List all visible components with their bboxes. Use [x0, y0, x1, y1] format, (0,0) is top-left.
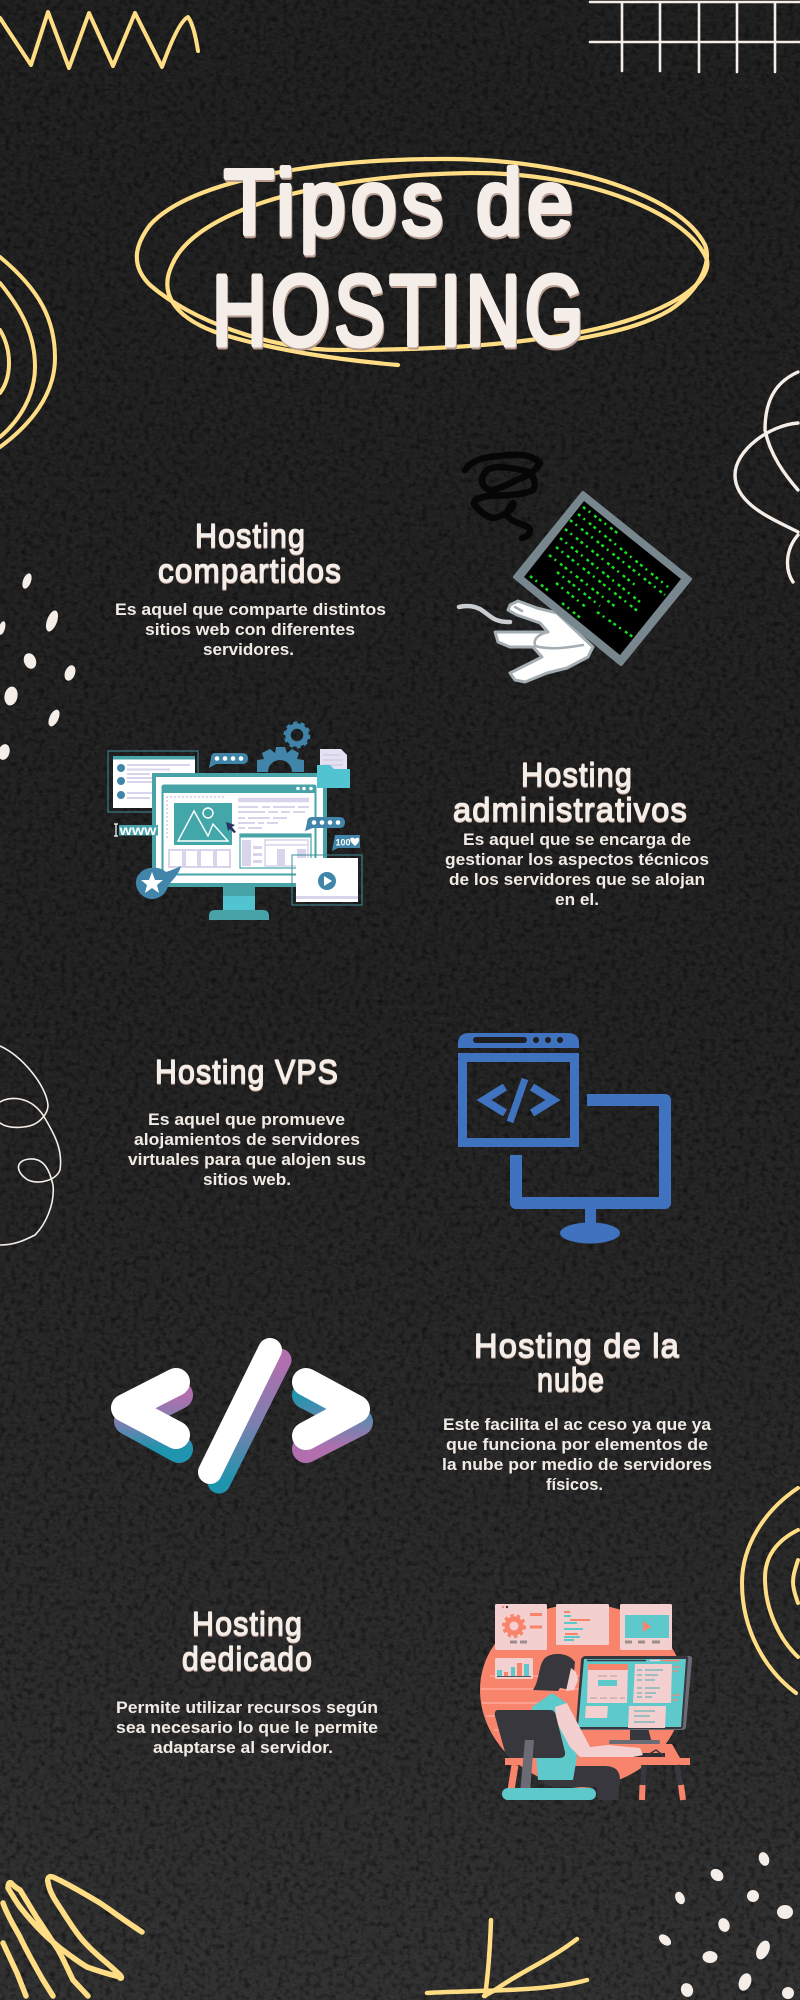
video panel — [620, 1604, 672, 1650]
legs — [541, 1766, 620, 1800]
decoration: yellow zigzag — [0, 12, 198, 68]
code symbol — [484, 1079, 553, 1122]
description: físicos. — [546, 1476, 603, 1494]
cursor — [226, 822, 236, 833]
finger lines — [515, 607, 583, 648]
description: Permite utilizar recursos según — [116, 1699, 378, 1717]
code panel — [556, 1604, 609, 1645]
description: Es aquel que comparte distintos — [115, 601, 386, 619]
monitor stand — [209, 887, 269, 920]
description: servidores. — [203, 641, 294, 659]
icon: tablet with code held by hand — [459, 455, 690, 682]
heading — [453, 756, 688, 828]
description: gestionar los aspectos técnicos — [445, 851, 709, 869]
icon: web design monitor — [108, 723, 362, 920]
browser top bar — [458, 1033, 579, 1048]
hand — [495, 601, 593, 682]
content lines — [238, 798, 309, 802]
heading — [474, 1327, 680, 1398]
symbol face — [125, 1350, 356, 1472]
left browser window — [108, 751, 198, 812]
description — [116, 1699, 378, 1757]
icon: 3D code symbol — [125, 1350, 359, 1482]
image block — [174, 803, 232, 845]
hair — [533, 1654, 575, 1691]
small gear — [285, 723, 309, 747]
heading: Hosting — [521, 756, 633, 793]
tablet — [515, 493, 690, 664]
small chart panel — [240, 834, 311, 868]
section: hosting administrativos text — [445, 756, 709, 909]
100 like bubble — [332, 835, 360, 851]
title scribble ellipse — [137, 159, 707, 365]
inner window — [162, 786, 316, 874]
monitor — [154, 775, 325, 885]
dotted frame — [167, 797, 225, 838]
decoration: right white scribble — [735, 372, 798, 582]
heading: Hosting VPS — [155, 1053, 339, 1090]
description: en el. — [555, 891, 599, 909]
description: Es aquel que promueve — [148, 1111, 345, 1129]
description — [115, 601, 386, 659]
decoration: right yellow spiral — [742, 1488, 798, 1693]
description: alojamientos de servidores — [134, 1131, 360, 1149]
folder and document — [317, 749, 350, 788]
heading — [158, 517, 342, 589]
decoration: left white dabs — [0, 572, 77, 761]
symbol depth — [128, 1360, 359, 1482]
description: de los servidores que se alojan — [449, 871, 705, 889]
description: sitios web con diferentes — [145, 621, 355, 639]
decoration: left yellow spiral — [0, 257, 55, 447]
heading: Hosting — [192, 1605, 303, 1642]
description: sea necesario lo que le permite — [116, 1719, 378, 1737]
section: hosting compartidos text — [115, 517, 386, 659]
browser window — [462, 1058, 574, 1142]
heading: administrativos — [453, 791, 688, 828]
large gear — [257, 747, 304, 772]
description — [442, 1416, 712, 1494]
heading: nube — [537, 1361, 605, 1398]
decoration: white grid — [590, 2, 800, 72]
description: Este facilita el ac ceso ya que ya — [443, 1416, 712, 1434]
chair — [495, 1710, 596, 1800]
title: Tipos de — [224, 152, 578, 254]
heading: Hosting — [195, 517, 306, 554]
description: Es aquel que se encarga de — [463, 831, 691, 849]
section: hosting de la nube text — [442, 1327, 712, 1494]
thumbnails — [169, 850, 230, 867]
salmon circle — [480, 1604, 684, 1788]
decoration: bottom-left yellow scribble — [3, 1877, 142, 1996]
shirt — [532, 1693, 577, 1780]
black scribble — [465, 455, 540, 538]
heading: compartidos — [158, 552, 342, 589]
icon: woman working at computer — [480, 1604, 692, 1800]
woman — [532, 1654, 643, 1800]
section: hosting dedicado text — [116, 1605, 378, 1757]
description — [445, 831, 709, 909]
code lines — [530, 507, 668, 637]
description: sitios web. — [203, 1171, 291, 1189]
wisp — [459, 606, 510, 622]
section: hosting VPS text — [128, 1053, 366, 1189]
title: HOSTING — [212, 255, 588, 367]
heading: Hosting de la — [474, 1327, 680, 1364]
monitor stand — [560, 1205, 620, 1244]
video window — [292, 855, 362, 905]
title — [212, 152, 588, 367]
chat bubble — [209, 753, 248, 768]
star badge — [136, 866, 181, 899]
monitor outline — [516, 1100, 665, 1203]
decoration: bottom yellow star strokes — [427, 1920, 587, 1996]
heading: dedicado — [182, 1640, 313, 1677]
description: que funciona por elementos de — [446, 1436, 708, 1454]
arm — [555, 1703, 643, 1757]
description: adaptarse al servidor. — [153, 1739, 333, 1757]
icon: blue code window and monitor — [458, 1033, 665, 1244]
gear panel — [495, 1604, 547, 1650]
decoration: left thin white scribble — [0, 1046, 61, 1245]
bar chart panel — [495, 1658, 533, 1679]
chat bubble 2 — [305, 817, 345, 831]
description: la nube por medio de servidores — [442, 1456, 712, 1474]
description — [128, 1111, 366, 1189]
www label: www — [118, 822, 157, 838]
heading — [182, 1605, 313, 1677]
description: virtuales para que alojen sus — [128, 1151, 366, 1169]
decoration: bottom-right white dabs — [657, 1851, 794, 1999]
desk — [505, 1744, 690, 1800]
100 like bubble: 100 — [336, 838, 351, 848]
face — [566, 1668, 578, 1691]
computer monitor — [576, 1656, 692, 1744]
